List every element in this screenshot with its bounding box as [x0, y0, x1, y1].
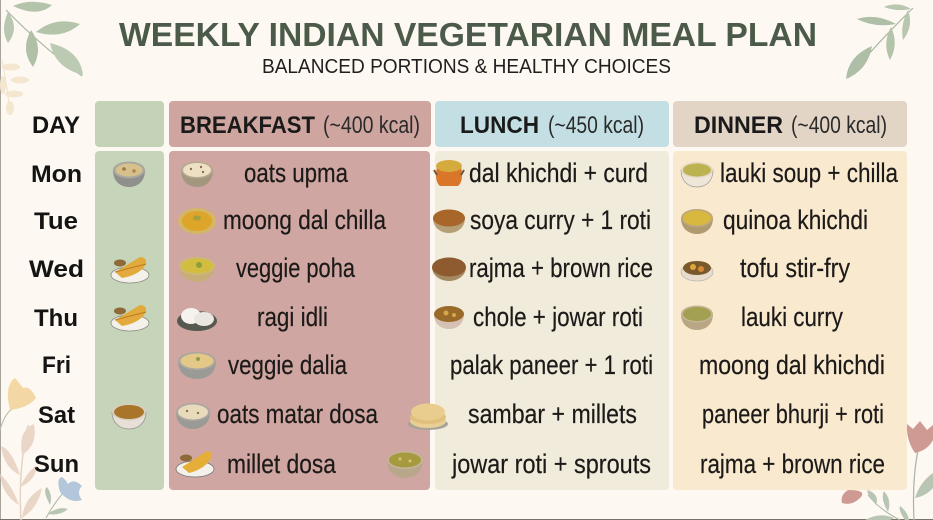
lunch text	[450, 158, 653, 479]
header label: day: DAY	[32, 112, 80, 139]
decoration: bottom-right flowers	[842, 421, 933, 520]
header: lunch: LUNCH	[460, 112, 539, 139]
breakfast text: moong dal chilla	[223, 205, 387, 235]
icon: dosa Wed	[111, 257, 149, 283]
day labels: Thu	[34, 305, 78, 332]
lunch text: rajma + brown rice	[469, 253, 653, 283]
icon: sprouts bowl	[387, 451, 423, 478]
icon: lauki curry	[681, 306, 713, 330]
dinner text	[699, 158, 899, 479]
lunch text: jowar roti + sprouts	[451, 449, 651, 479]
icon: chole bowl	[434, 306, 464, 329]
dinner text: lauki curry	[741, 302, 843, 332]
dinner text: quinoa khichdi	[723, 205, 868, 235]
breakfast text: millet dosa	[227, 449, 337, 479]
panel: snack column	[95, 151, 164, 490]
header: dinner: DINNER	[694, 112, 783, 139]
header: dinner: (~400 kcal)	[791, 112, 887, 139]
icon: veggie poha	[179, 257, 215, 282]
header row	[32, 101, 907, 147]
icon: oats upma	[181, 162, 213, 187]
title: WEEKLY INDIAN VEGETARIAN MEAL PLAN	[119, 16, 817, 53]
icon: ragi idli	[177, 308, 217, 331]
day labels: Mon	[31, 161, 82, 188]
icon: quinoa khichdi	[681, 209, 713, 234]
icon: moong dal chilla	[178, 208, 216, 234]
icon: dosa Thu	[111, 305, 149, 331]
dinner text: paneer bhurji + roti	[702, 399, 884, 429]
icon: dal khichdi pot	[434, 160, 464, 186]
icon: bowl Mon	[113, 162, 145, 187]
day labels: Sun	[34, 451, 79, 478]
panel: dinner column	[673, 151, 907, 490]
decoration: top-left leaves	[4, 2, 83, 76]
breakfast text: oats matar dosa	[217, 399, 379, 429]
header: lunch	[435, 101, 669, 147]
icon: veggie dalia	[178, 352, 216, 379]
icon: oats matar dosa	[176, 403, 210, 429]
panel: lunch column	[408, 151, 669, 490]
breakfast text	[217, 158, 387, 479]
dinner text: tofu stir-fry	[740, 253, 850, 283]
lunch text: sambar + millets	[468, 399, 637, 429]
lunch text: dal khichdi + curd	[469, 158, 648, 188]
icon: soya curry	[433, 210, 465, 233]
breakfast text: oats upma	[244, 158, 349, 188]
icon: lauki soup	[681, 162, 713, 187]
day labels	[29, 161, 84, 478]
header: breakfast: (~400 kcal)	[323, 112, 420, 139]
decoration: top-right leaves	[846, 4, 913, 79]
lunch text: palak paneer + 1 roti	[450, 350, 653, 380]
day labels: Sat	[38, 402, 75, 429]
dinner text: moong dal khichdi	[699, 350, 885, 380]
day labels: Fri	[42, 352, 71, 379]
header: breakfast: BREAKFAST	[180, 112, 315, 139]
dinner text: lauki soup + chilla	[720, 158, 899, 188]
header: snack swatch	[95, 101, 164, 147]
subtitle: BALANCED PORTIONS & HEALTHY CHOICES	[262, 56, 671, 78]
header: breakfast	[169, 101, 431, 147]
breakfast text: veggie poha	[236, 253, 356, 283]
header: lunch: (~450 kcal)	[548, 112, 644, 139]
header: dinner	[673, 101, 907, 147]
icon: tofu stir-fry	[681, 261, 713, 281]
icon: curry bowl Sat	[112, 404, 146, 429]
breakfast text: ragi idli	[257, 302, 328, 332]
decoration: bottom-left flowers	[0, 378, 82, 520]
day labels: Tue	[34, 208, 78, 235]
icon: millet dosa	[176, 451, 214, 477]
lunch text: soya curry + 1 roti	[470, 205, 651, 235]
panel: breakfast column	[169, 151, 430, 490]
day labels: Wed	[29, 256, 84, 283]
lunch text: chole + jowar roti	[473, 302, 643, 332]
icon: rajma bowl	[432, 258, 466, 281]
dinner text: rajma + brown rice	[700, 449, 885, 479]
decoration: left tan sprig	[0, 60, 29, 115]
breakfast text: veggie dalia	[228, 350, 348, 380]
icon: roti stack	[408, 404, 448, 430]
